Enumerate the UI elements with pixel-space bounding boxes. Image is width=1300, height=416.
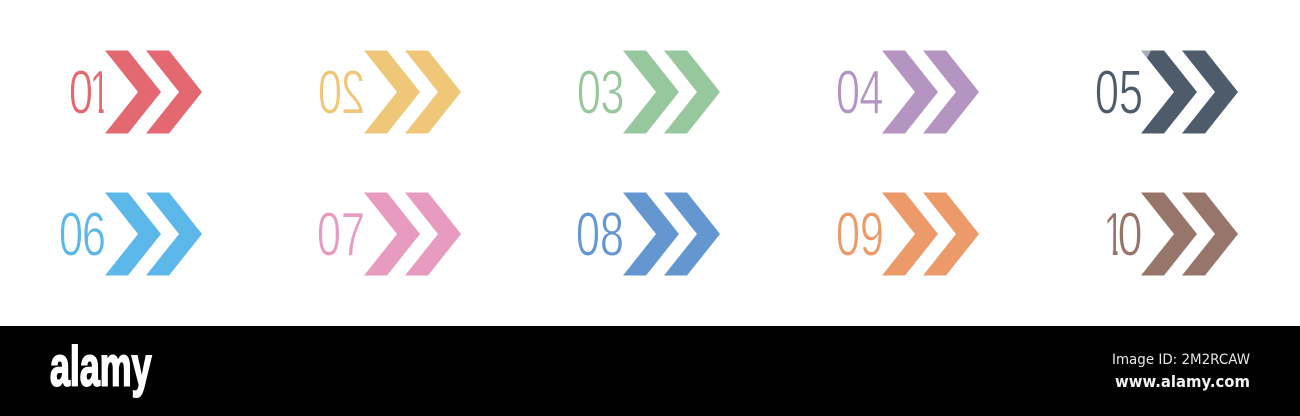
number 01: 1 bbox=[90, 58, 110, 127]
number 09: 0 bbox=[836, 201, 860, 269]
number 07: 0 bbox=[317, 201, 341, 269]
number 06: 6 bbox=[82, 201, 106, 269]
item 02 bbox=[318, 50, 461, 134]
number 09 bbox=[836, 201, 884, 269]
double chevron 08 bbox=[623, 192, 720, 276]
item 03 bbox=[577, 50, 720, 134]
image id: Image ID: 2M2RCAW bbox=[1112, 352, 1250, 368]
website: www.alamy.com bbox=[1115, 372, 1250, 391]
item 04 bbox=[836, 50, 979, 134]
number 02 bbox=[318, 59, 365, 127]
item 08 bbox=[576, 192, 720, 276]
footer band bbox=[0, 326, 1300, 416]
item 05 bbox=[1095, 50, 1238, 134]
number 01 bbox=[70, 70, 104, 114]
item 06 bbox=[59, 192, 202, 276]
number 06: 0 bbox=[59, 201, 83, 269]
alamy logo: alamy bbox=[50, 334, 152, 397]
number 06 bbox=[59, 201, 106, 269]
number 10: 0 bbox=[1118, 200, 1142, 269]
number 04 bbox=[836, 59, 884, 127]
number 07 bbox=[317, 201, 365, 269]
number 03: 0 bbox=[577, 59, 601, 127]
double chevron 10 bbox=[1141, 192, 1238, 276]
item 10 bbox=[1104, 192, 1238, 276]
number 02: 2 bbox=[341, 59, 365, 127]
number 10: 1 bbox=[1104, 200, 1124, 269]
number 07: 7 bbox=[341, 201, 365, 269]
number 01: 0 bbox=[69, 59, 93, 127]
chevron corner highlight bbox=[1141, 50, 1151, 58]
double chevron 05 bbox=[1141, 50, 1238, 134]
double chevron 04 bbox=[882, 50, 979, 134]
item 01 bbox=[69, 50, 202, 134]
double chevron 09 bbox=[882, 192, 979, 276]
double chevron 07 bbox=[364, 192, 461, 276]
number 08: 8 bbox=[600, 201, 624, 269]
number 03: 3 bbox=[600, 59, 625, 127]
double chevron 02 bbox=[364, 50, 461, 134]
number 05: 0 bbox=[1095, 59, 1119, 127]
item 09 bbox=[836, 192, 979, 276]
double chevron 03 bbox=[623, 50, 720, 134]
item 07 bbox=[317, 192, 461, 276]
double chevron 06 bbox=[105, 192, 202, 276]
number 05 bbox=[1095, 59, 1143, 127]
number 04: 0 bbox=[836, 59, 860, 127]
number 10 bbox=[1108, 212, 1140, 256]
double chevron 01 bbox=[105, 50, 202, 134]
number 08 bbox=[576, 201, 624, 269]
number 09: 9 bbox=[860, 201, 884, 269]
number 05: 5 bbox=[1119, 59, 1143, 127]
number 08: 0 bbox=[576, 201, 600, 269]
number 03 bbox=[577, 59, 625, 127]
number 02: 0 bbox=[318, 59, 342, 127]
number 04: 4 bbox=[859, 59, 884, 127]
